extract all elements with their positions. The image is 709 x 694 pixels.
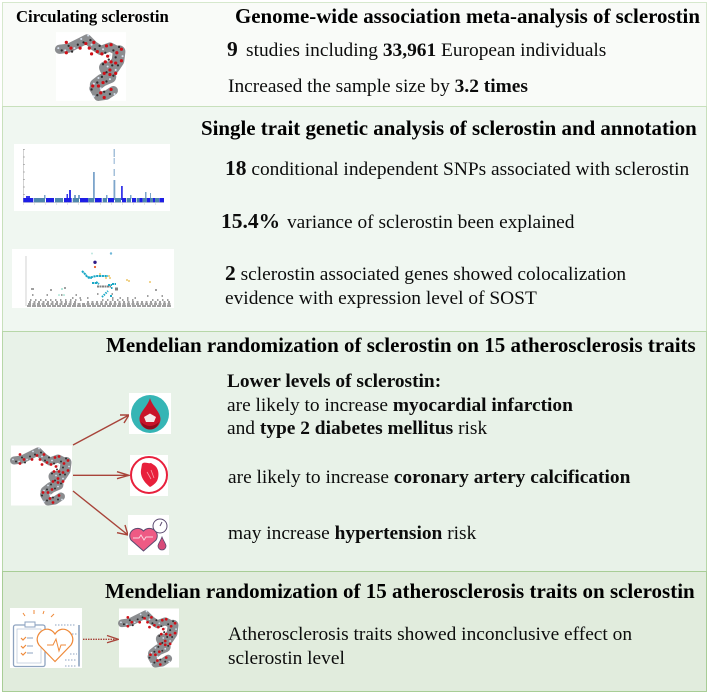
icon: sclerostin molecule xyxy=(118,608,179,668)
text: inconclusive effect xyxy=(228,624,632,669)
text: studies: 9 studies including 33,961 European individuals xyxy=(227,37,606,61)
text: coronary artery calcification: are likely to increase coronary artery calcification xyxy=(228,467,630,488)
icon: heart xyxy=(130,455,168,496)
icon: blood drop xyxy=(129,393,171,434)
panel: Mendelian randomization of sclerostin on traits xyxy=(2,331,707,572)
icon: hypertension heart xyxy=(128,515,169,555)
heading: genome-wide association: Genome-wide association meta-analysis of sclerostin xyxy=(235,4,700,28)
panel: single trait genetic analysis xyxy=(2,106,707,332)
text: lower levels: Lower levels of sclerostin: xyxy=(227,371,441,392)
arrow: dotted xyxy=(83,634,119,644)
icon: clipboard and heart xyxy=(10,608,82,668)
text: lower levels: are likely to increase myocardial infarction xyxy=(227,395,573,416)
text: lower levels: and type 2 diabetes mellitus risk xyxy=(227,418,487,439)
text: inconclusive effect: Atherosclerosis traits showed inconclusive effect on xyxy=(228,624,632,645)
panel: Mendelian randomization of traits on sclerostin xyxy=(2,571,707,692)
text: sample size: Increased the sample size by 3.2 times xyxy=(228,76,528,97)
heading: MR traits on sclerostin: Mendelian randomization of 15 atherosclerosis traits on sclerostin xyxy=(105,579,695,603)
text: colocalization: evidence with expression level of SOST xyxy=(225,288,537,309)
text: 18 SNPs: 18 conditional independent SNPs associated with sclerostin xyxy=(225,156,689,180)
text: inconclusive effect: sclerostin level xyxy=(228,648,345,669)
text: hypertension: may increase hypertension risk xyxy=(228,523,476,544)
heading: MR sclerostin on traits: Mendelian randomization of sclerostin on 15 atherosclerosis traits xyxy=(106,333,696,357)
icon: sclerostin molecule xyxy=(54,34,126,101)
chart: regional association plot xyxy=(12,249,174,308)
text: colocalization xyxy=(225,261,626,309)
icon: sclerostin molecule xyxy=(10,446,72,506)
chart: Manhattan plot xyxy=(14,144,170,211)
text: lower levels xyxy=(227,371,573,439)
label: circulating sclerostin: Circulating sclerostin xyxy=(16,7,169,26)
panel: genome-wide meta-analysis xyxy=(2,2,707,107)
heading: single trait analysis: Single trait genetic analysis of sclerostin and annotation xyxy=(201,116,697,140)
text: colocalization: 2 sclerostin associated genes showed colocalization xyxy=(225,261,626,285)
text: variance explained: 15.4% variance of sclerostin been explained xyxy=(221,209,574,233)
